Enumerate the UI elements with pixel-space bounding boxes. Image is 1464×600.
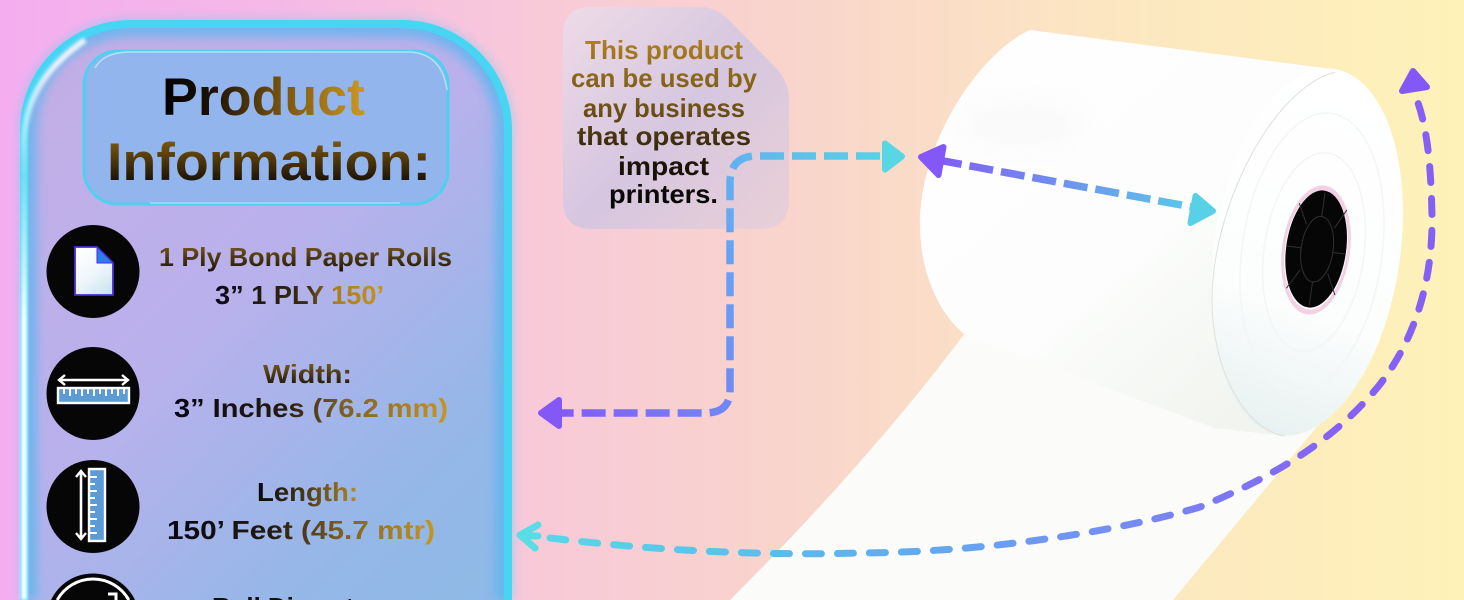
- icon: paper sheet: [46, 225, 140, 318]
- spec row: roll diameter: [51, 573, 387, 600]
- callout text: any business: [583, 93, 745, 123]
- arrowhead: cyan: [1190, 196, 1213, 223]
- soft shading: [960, 101, 1080, 149]
- heading: Product Information: [107, 68, 431, 192]
- callout text: can be used by: [571, 63, 758, 93]
- arrowhead: purple top: [1402, 71, 1427, 91]
- paper roll photo: [730, 30, 1426, 600]
- callout: compatible businesses: [563, 7, 789, 229]
- icon: vertical ruler: [46, 460, 140, 553]
- heading box: product information: [84, 51, 448, 204]
- text: paper type: 1 Ply Bond Paper Rolls: [159, 242, 452, 272]
- icon: roll diameter: [51, 573, 135, 600]
- panel: product information: [24, 24, 509, 600]
- arrowhead: cyan right: [885, 144, 902, 170]
- text: length: 150’ Feet (45.7 mtr): [167, 515, 435, 545]
- arrowhead: open cyan: [520, 525, 538, 548]
- heading: Product Information: Information:: [107, 133, 431, 192]
- roll body: [920, 30, 1340, 436]
- text: length: Length:: [257, 477, 358, 507]
- text: width: 3” Inches (76.2 mm): [174, 393, 448, 423]
- callout text: [571, 35, 758, 209]
- arrow: roll length: [520, 71, 1432, 554]
- face edge: [1212, 72, 1335, 436]
- arrow: roll width: [921, 147, 1213, 223]
- icon: horizontal ruler: [46, 347, 140, 440]
- text: width: Width:: [263, 359, 352, 389]
- text: paper type: [159, 242, 452, 310]
- text: width: [174, 359, 448, 423]
- callout text: that operates: [577, 121, 751, 151]
- callout text: This product: [585, 35, 743, 65]
- heading: Product Information: Product: [162, 68, 365, 127]
- spec row: paper type: [46, 225, 452, 318]
- arrow: callout to panel and roll: [541, 144, 902, 426]
- arrowhead: purple: [921, 147, 944, 175]
- core tube: [1273, 181, 1359, 319]
- roll end face: [1188, 55, 1426, 449]
- text: length: [167, 477, 435, 545]
- spec row: length: [46, 460, 435, 553]
- arrowhead: purple left: [541, 400, 559, 426]
- callout text: printers.: [609, 179, 718, 209]
- text: paper type: 3” 1 PLY 150’: [215, 280, 384, 310]
- callout text: impact: [618, 151, 709, 181]
- spec row: width: [46, 347, 448, 440]
- unrolled paper strip: [730, 333, 1320, 600]
- face rings: [1223, 104, 1401, 400]
